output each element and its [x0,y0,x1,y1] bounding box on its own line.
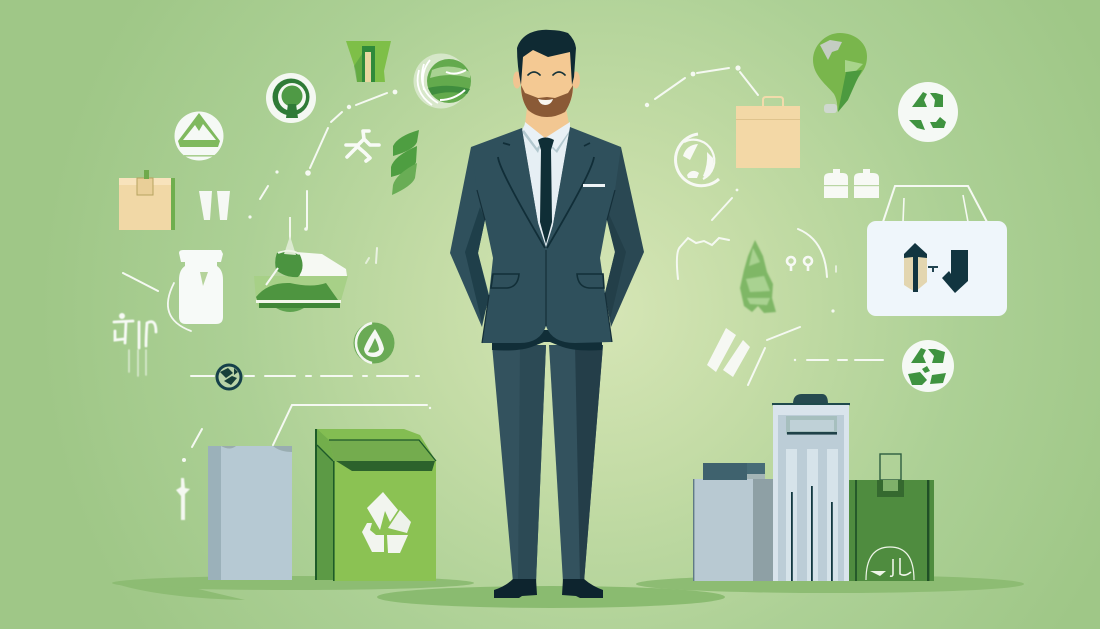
collar [522,122,571,153]
jacket body [471,127,621,343]
icon: dark patterned circle [216,364,242,390]
person: man in suit [450,30,644,598]
icon: two small bottles [824,169,879,198]
lapel outlines [498,143,594,248]
icon: recycling symbol [362,492,411,553]
bin: grey box with lid [693,463,773,581]
bin: tall grey cabinet [772,394,850,581]
hair [517,30,576,85]
connector lines: right [655,68,883,385]
bin: grey bag [208,446,292,580]
icon: green droplet badge [354,322,394,364]
icon: landscape bowl with drop [254,217,348,312]
icon: green shield [346,41,391,82]
connector dots: right [645,65,835,361]
pocket square [583,184,605,187]
icon: green globe pin [813,33,867,113]
bin: green tote bag [849,454,934,581]
icon: down arrow [942,250,968,293]
legs [492,345,603,582]
lapels [498,127,594,247]
beard [521,85,573,117]
panel: white card with arrows [867,186,1007,316]
icon: two location rings [787,257,812,271]
icon: branching snowflake [346,131,379,161]
icon: green swirl globe [414,54,471,108]
shirt [522,122,570,247]
icon: mountain badge [174,112,224,160]
icon: white diagonal bars [707,328,750,377]
icon: recycling badge lower [902,340,954,392]
icon: sparse pine tree [740,240,776,313]
icon: tree ring badge [266,73,316,123]
icon: circular globe arrows [676,134,719,186]
left arm [450,147,490,327]
eyes [528,72,565,75]
icon: figures and pipes [114,314,156,376]
bin: green recycling box [315,429,436,581]
icon: two white cups [199,191,230,220]
small faint figure left of bag [176,478,190,520]
ears [513,72,521,88]
tie [538,138,554,244]
icon: striped leaf [391,130,419,195]
right arm [600,147,644,327]
icon: kraft shopping bag [736,97,800,168]
jacket hem shadow [492,330,602,350]
connector lines: left [123,93,427,447]
icon: cardboard box [119,170,175,230]
icon: up arrow [904,243,927,292]
shoes [494,579,603,598]
jacket pockets [491,274,604,288]
face [521,48,573,117]
ground shadows [112,575,1024,608]
icon: recycling badge upper [898,82,958,142]
connector dots: left [182,90,431,462]
jacket seams [477,190,615,343]
neck [525,108,569,139]
icon: white jar [168,250,223,331]
smile [538,99,553,105]
icon: small hook [928,267,938,272]
